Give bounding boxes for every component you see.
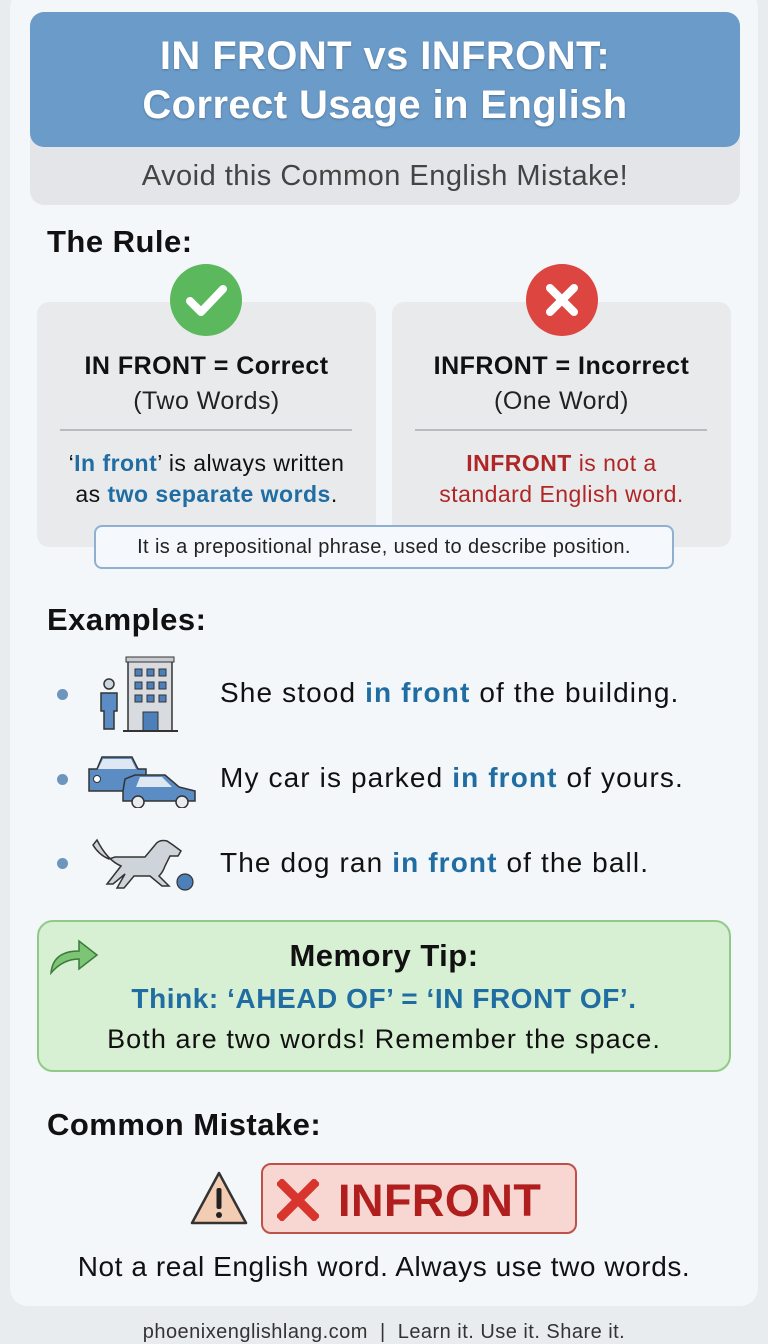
title: IN FRONT vs INFRONT: bbox=[160, 34, 610, 78]
subtitle: Avoid this Common English Mistake! bbox=[142, 160, 628, 192]
heading: common mistake: Common Mistake: bbox=[47, 1107, 321, 1142]
title correct: IN FRONT = Correct bbox=[84, 352, 329, 380]
icon: curved arrow bbox=[50, 940, 98, 975]
icon: dog and ball bbox=[92, 838, 194, 891]
badge: infront wrong: INFRONT bbox=[338, 1175, 541, 1226]
explanation correct bbox=[69, 450, 344, 507]
header bbox=[30, 12, 740, 205]
callout: prepositional phrase: It is a prepositional phrase, used to describe position. bbox=[137, 536, 631, 558]
example 1 bbox=[57, 656, 679, 732]
title bbox=[30, 12, 740, 147]
heading: the rule: The Rule: bbox=[47, 224, 193, 259]
icon: person and building bbox=[100, 656, 178, 732]
heading: examples: Examples: bbox=[47, 602, 206, 637]
explanation incorrect: INFRONT is not a bbox=[466, 450, 657, 476]
explanation correct: ‘In front’ is always written bbox=[69, 450, 344, 476]
callout: prepositional phrase bbox=[94, 525, 674, 569]
panel: memory tip bbox=[37, 920, 731, 1072]
sentence 3: The dog ran in front of the ball. bbox=[220, 847, 649, 878]
panel: incorrect bbox=[392, 302, 731, 547]
footer: phoenixenglishlang.com | Learn it. Use it. Share it. bbox=[143, 1321, 625, 1343]
panel: correct bbox=[37, 302, 376, 547]
example 2 bbox=[57, 756, 684, 808]
sentence 2: My car is parked in front of yours. bbox=[220, 762, 684, 793]
panel: correct: (Two Words) bbox=[133, 387, 280, 415]
title: Correct Usage in English bbox=[142, 83, 628, 127]
badge: infront wrong bbox=[261, 1163, 577, 1234]
icon: cross bbox=[526, 264, 598, 336]
sentence 1: She stood in front of the building. bbox=[220, 677, 679, 708]
explanation correct: as two separate words. bbox=[75, 481, 338, 507]
explanation incorrect bbox=[439, 450, 684, 507]
panel: incorrect: (One Word) bbox=[494, 387, 629, 415]
note: not a real word: Not a real English word. Always use two words. bbox=[78, 1251, 690, 1282]
memory tip note: Both are two words! Remember the space. bbox=[107, 1024, 661, 1054]
explanation incorrect: standard English word. bbox=[439, 481, 684, 507]
memory tip rule: Think: ‘AHEAD OF’ = ‘IN FRONT OF’. bbox=[131, 983, 637, 1014]
title incorrect: INFRONT = Incorrect bbox=[434, 352, 689, 380]
subtitle bar bbox=[30, 112, 740, 205]
icon: check bbox=[170, 264, 242, 336]
icon: cars bbox=[88, 756, 196, 808]
example 3 bbox=[57, 838, 649, 891]
icon: warning bbox=[190, 1172, 248, 1224]
memory tip title: Memory Tip: bbox=[289, 938, 478, 973]
